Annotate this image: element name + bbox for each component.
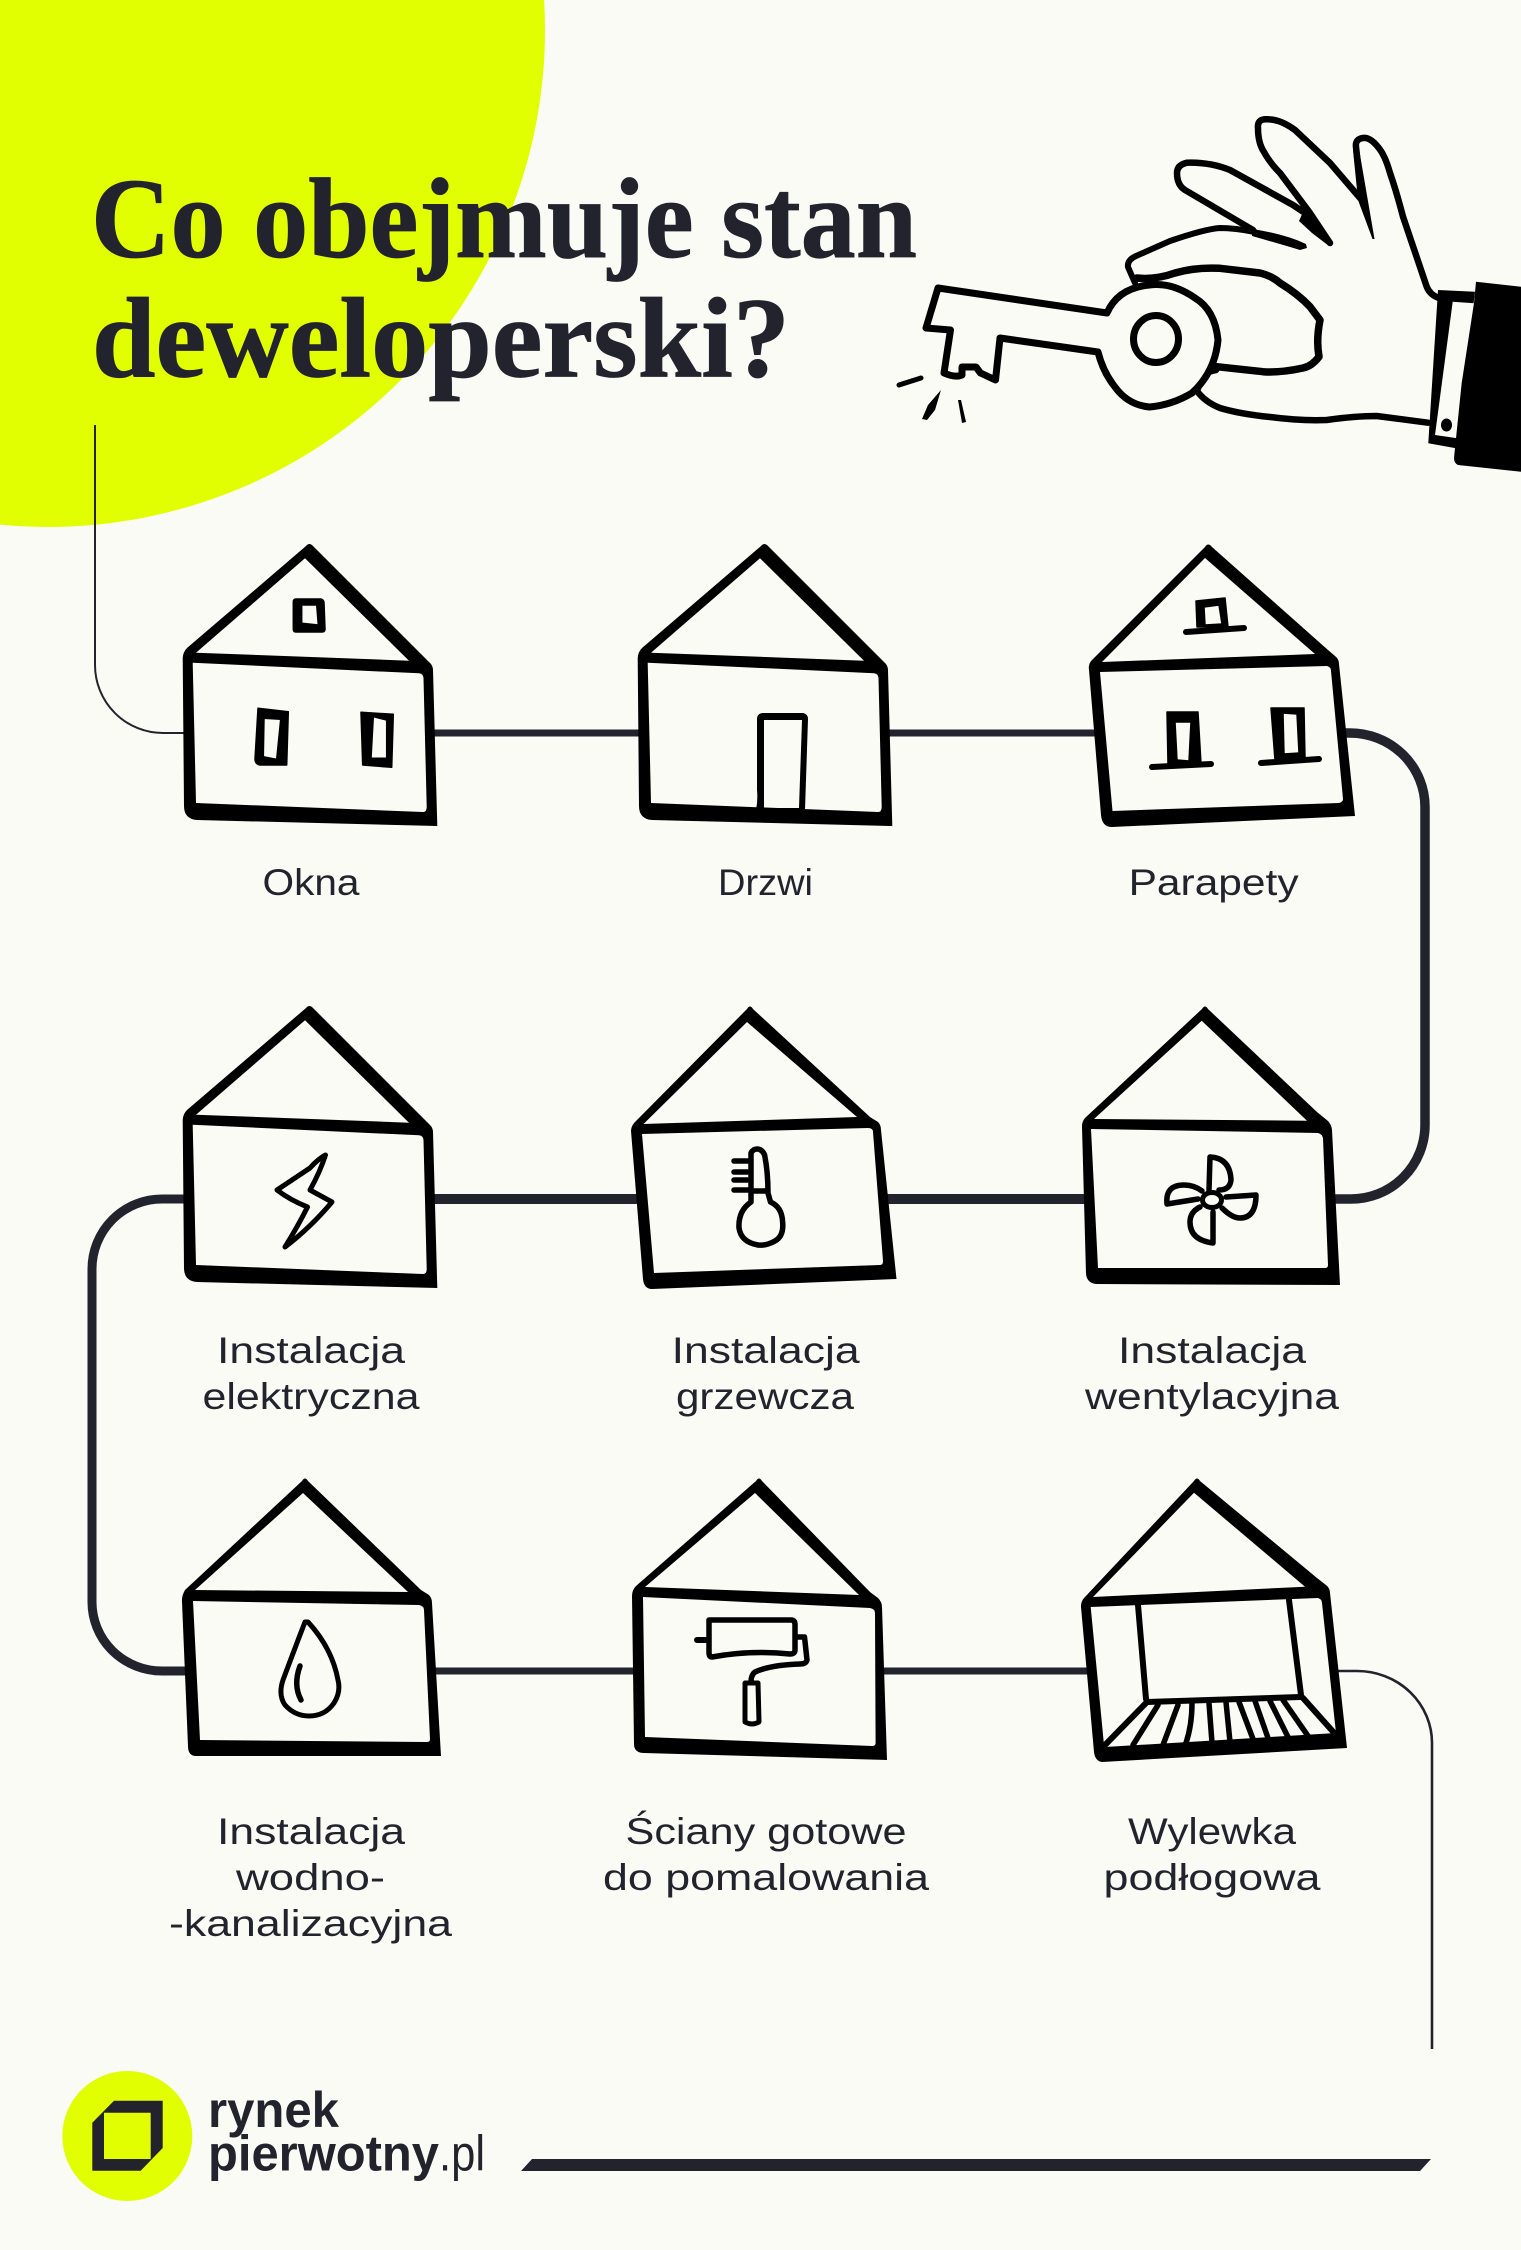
door [756,713,808,810]
house outline [1089,544,1355,827]
logo badge [62,2071,192,2201]
label: wentylacyjna [1084,1376,1339,1417]
label [603,1810,930,1898]
label: Ściany gotowe [626,1810,906,1852]
label [1104,1811,1321,1898]
label: do pomalowania [603,1857,930,1898]
logo wordmark: rynek [208,2082,339,2138]
decorative yellow circle [0,0,545,527]
label [169,1811,453,1944]
house outline [1082,1006,1340,1285]
connector: right curve to row two [1320,733,1425,1199]
panel: Instalacja elektryczna [183,1006,437,1417]
icon: thermometer [734,1149,783,1245]
interior walls and floor planks [1105,1600,1336,1745]
cuff [1428,290,1475,448]
panel: Wylewka podłogowa [1081,1478,1347,1898]
label: Wylewka [1128,1811,1296,1852]
connector: row two [430,1194,1100,1204]
label: Instalacja [672,1330,860,1371]
label [202,1330,420,1417]
hand outline [1128,119,1439,423]
label: Instalacja [217,1330,406,1371]
label: Instalacja [1118,1330,1307,1371]
bottom bar [521,2159,1431,2171]
house outline [631,1006,896,1289]
panel: Okna [183,544,437,903]
logo: rynekpierwotny.pl [62,2071,485,2201]
panel: Instalacja wodno-kanalizacyjna [169,1478,453,1944]
label: Okna [262,862,360,903]
house outline [638,544,892,826]
title: Co obejmuje stan [91,155,917,282]
connector: row three [430,1668,1100,1674]
icon: lightning bolt [277,1155,332,1247]
connector: row one [430,730,1100,736]
house outline [182,1478,441,1756]
icon: fan [1167,1157,1256,1243]
title [91,155,917,402]
attic window with sill [1196,598,1228,627]
icon: paint roller [697,1620,807,1724]
label: Instalacja [217,1811,406,1852]
house outline [1081,1478,1347,1762]
panel: Drzwi [638,544,892,903]
label: wodno- [235,1857,385,1898]
label [1084,1330,1339,1417]
sleeve [1454,282,1521,472]
right window [361,712,393,767]
logo wordmark: .pl [439,2126,485,2182]
icon: hand holding key [899,119,1521,472]
connector: left curve to row three [92,1199,190,1671]
right window with sill [1271,708,1305,760]
label: elektryczna [202,1376,420,1417]
icon: water drop [281,1622,339,1716]
label: -kanalizacyjna [169,1903,453,1944]
label [672,1330,860,1417]
house outline [183,544,437,826]
left window with sill [1167,712,1201,764]
label: grzewcza [676,1376,854,1417]
sparks [899,378,921,385]
logo wordmark: pierwotny [208,2126,439,2182]
title: deweloperski? [92,275,790,402]
left window [255,708,288,765]
connector: thin start line from title to first house [95,425,190,733]
label: Parapety [1129,862,1299,903]
panel: Instalacja grzewcza [631,1006,896,1417]
connector: end line to bottom bar [1335,1671,1432,2049]
label: Drzwi [718,862,813,903]
key bow hole [1134,316,1178,362]
logo mark [92,2101,163,2171]
attic window [293,599,325,632]
label: podłogowa [1104,1857,1321,1898]
house outline [632,1478,887,1760]
house outline [183,1006,437,1288]
panel: Ściany gotowe do pomalowania [603,1478,930,1898]
logo wordmark [208,2082,485,2182]
panel: Parapety [1089,544,1355,903]
key [926,285,1218,407]
panel: Instalacja wentylacyjna [1082,1006,1340,1417]
